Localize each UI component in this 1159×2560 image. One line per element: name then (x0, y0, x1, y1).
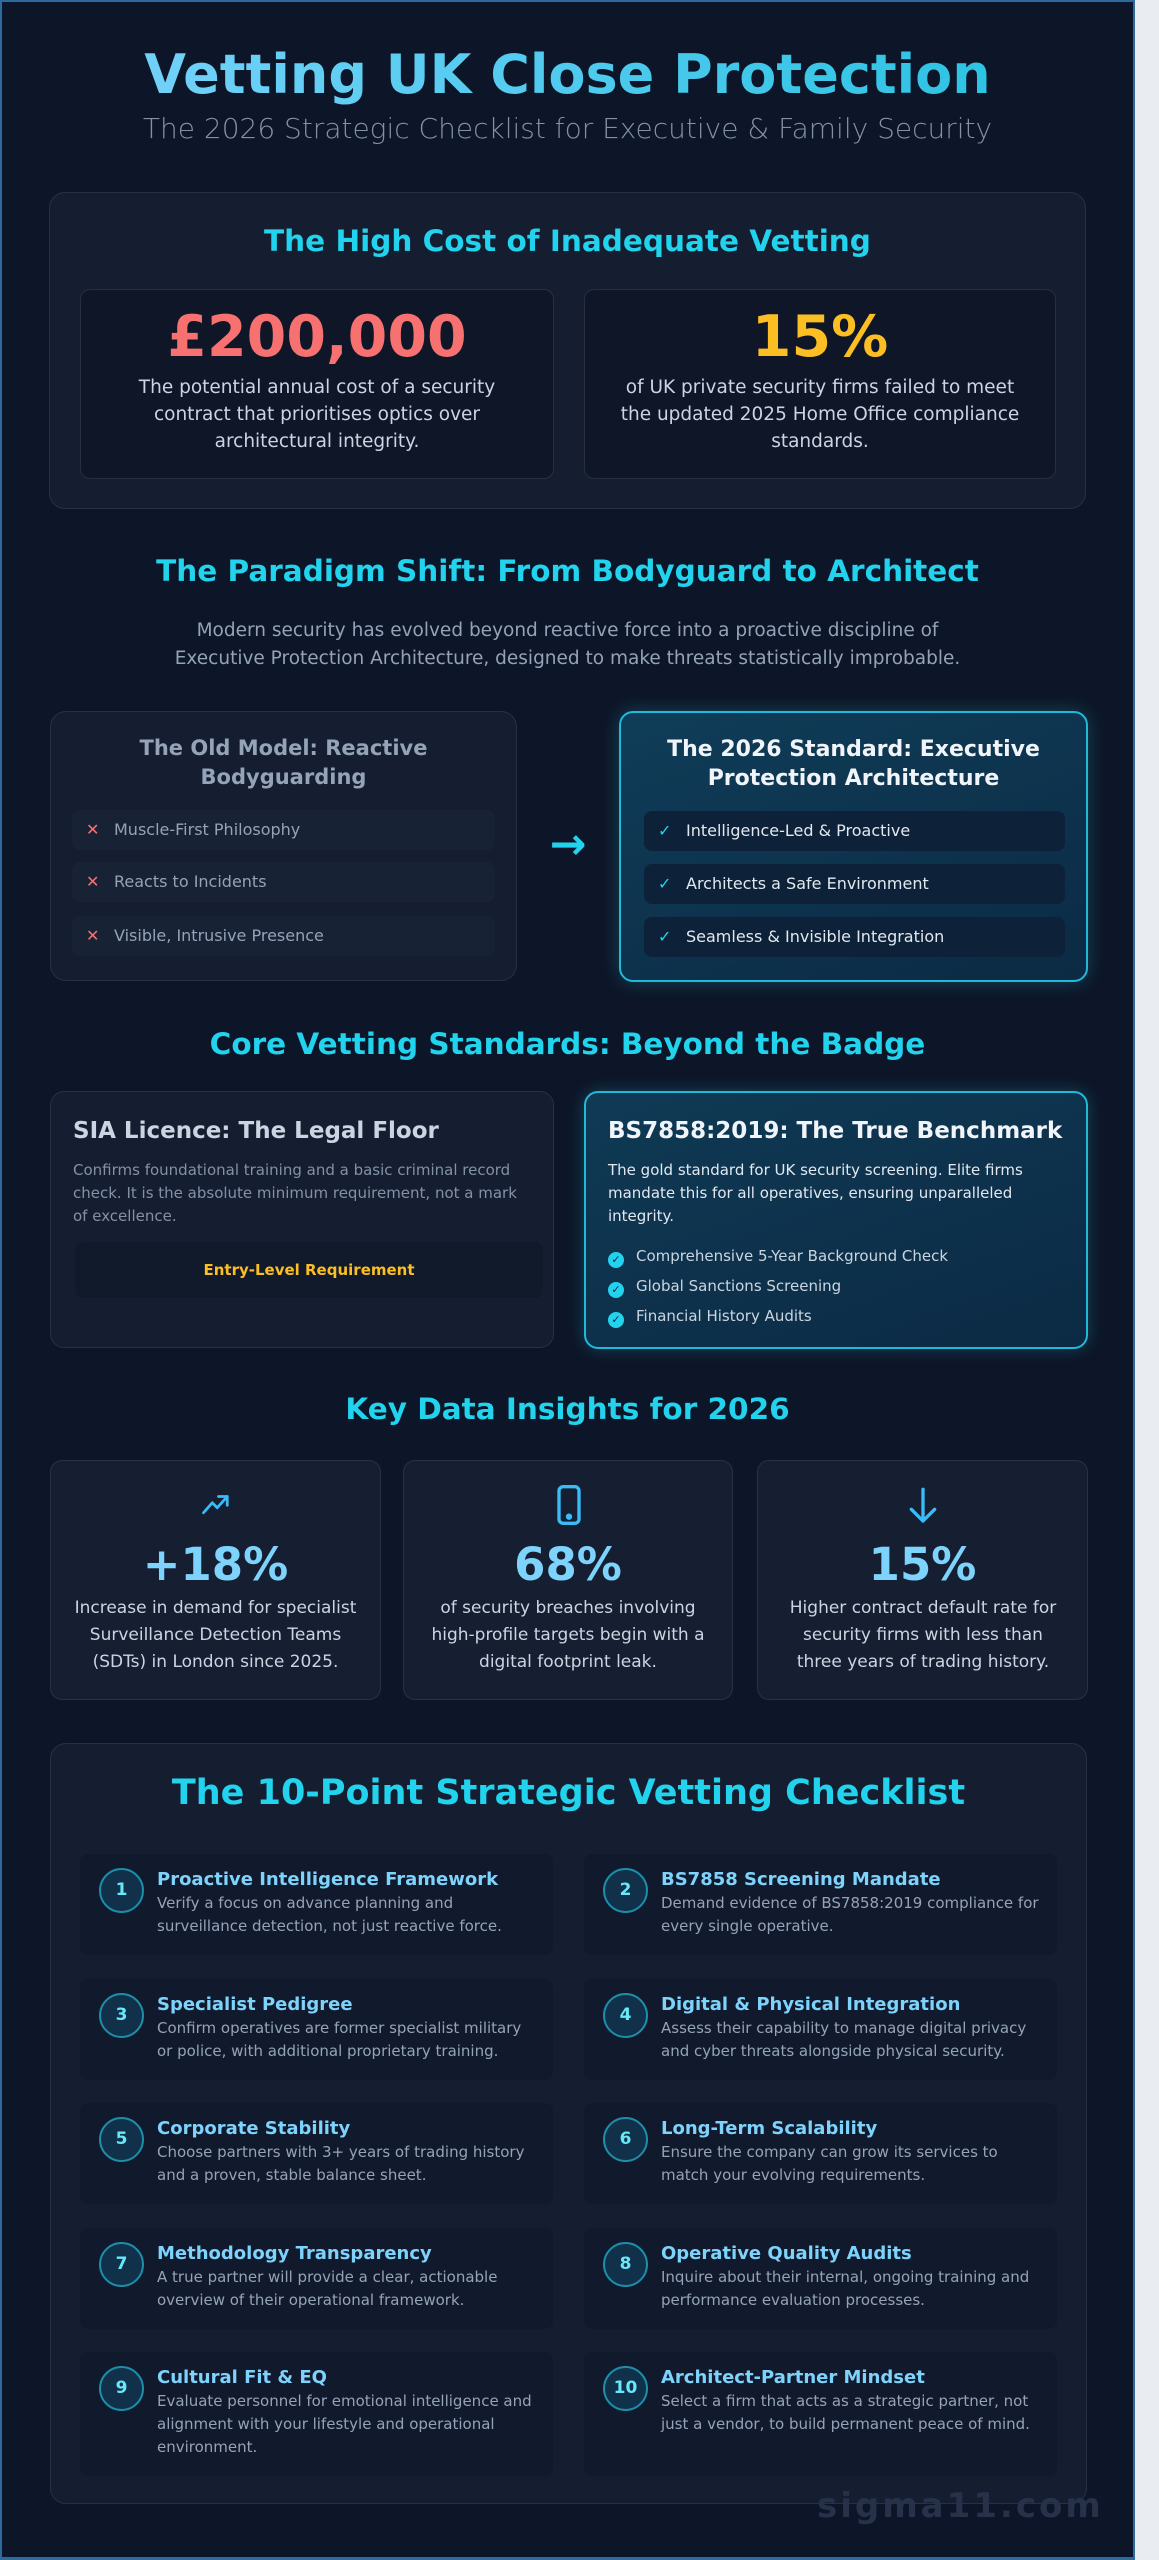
item 8: 8 (620, 2254, 631, 2274)
card: 68%: of security breaches involving high-profile targets begin with a digital footprint leak. (431, 1598, 705, 1672)
item 3: Confirm operatives are former specialist military or police, with additional proprietary training. (157, 2019, 521, 2060)
item 5: 5 (116, 2129, 127, 2149)
card: +18%: +18% (143, 1538, 288, 1591)
BS bullets: Global Sanctions Screening (636, 1277, 841, 1295)
stat: 15%: 15% (752, 304, 888, 370)
item 6 (584, 2103, 1057, 2204)
item 1: 1 (116, 1880, 127, 1900)
old items: Muscle-First Philosophy (114, 820, 300, 839)
item 10: 10 (614, 2378, 637, 2398)
stat: 15% (584, 289, 1056, 479)
card: 15% (757, 1460, 1088, 1700)
title (2, 40, 1133, 110)
new standard title: The 2026 Standard: Executive (667, 737, 1040, 762)
SIA badge: Entry-Level Requirement (203, 1261, 415, 1279)
item 4 (584, 1979, 1057, 2080)
item 7 (80, 2228, 553, 2329)
item 10: Architect-Partner Mindset (661, 2367, 925, 2388)
old items: Visible, Intrusive Presence (114, 926, 324, 945)
item 2: 2 (620, 1880, 631, 1900)
item 1: Verify a focus on advance planning and surveillance detection, not just reactive force. (157, 1894, 502, 1935)
BS bullets (608, 1247, 948, 1328)
old model title (140, 736, 427, 789)
checklist heading: The 10-Point Strategic Vetting Checklist (172, 1773, 965, 1813)
card: 15%: Higher contract default rate for security firms with less than three years of trading history. (790, 1598, 1056, 1672)
item 9 (80, 2352, 553, 2476)
heading: core vetting: Core Vetting Standards: Beyond the Badge (210, 1027, 925, 1061)
item 5: Corporate Stability (157, 2118, 350, 2139)
item 3 (80, 1979, 553, 2080)
item 7: Methodology Transparency (157, 2243, 432, 2264)
panel: checklist (50, 1743, 1087, 2504)
BS bullets: ✓ (611, 1283, 621, 1296)
old items: Reacts to Incidents (114, 872, 267, 891)
watermark: sigma11.com (817, 2486, 1104, 2526)
item 9: Cultural Fit & EQ (157, 2367, 327, 2388)
SIA desc: Confirms foundational training and a basic criminal record check. It is the absolute minimum requirement, not a mark of excellence. (73, 1161, 517, 1225)
SIA title: SIA Licence: The Legal Floor (73, 1118, 439, 1144)
item 6: Ensure the company can grow its services to match your evolving requirements. (661, 2143, 998, 2184)
title: Vetting UK Close Protection (144, 43, 991, 106)
item 9: 9 (116, 2378, 127, 2398)
BS desc: The gold standard for UK security screening. Elite firms mandate this for all operatives, ensuring unparalleled integrity. (608, 1161, 1023, 1225)
SIA badge (75, 1242, 543, 1298)
item 2: BS7858 Screening Mandate (661, 1869, 941, 1890)
panel: BS7858 (584, 1091, 1088, 1349)
item 9: Evaluate personnel for emotional intelligence and alignment with your lifestyle and operational environment. (157, 2392, 532, 2456)
heading: key data: Key Data Insights for 2026 (345, 1392, 790, 1426)
card: +18%: Increase in demand for specialist Surveillance Detection Teams (SDTs) in London since 2025. (75, 1598, 356, 1672)
new items (644, 811, 1065, 957)
icon: trending up (202, 1495, 229, 1514)
intro paragraph: Modern security has evolved beyond reactive force into a proactive discipline of (197, 620, 938, 641)
item 1: Proactive Intelligence Framework (157, 1869, 498, 1890)
stat: 200000 (80, 289, 554, 479)
item 10: Select a firm that acts as a strategic partner, not just a vendor, to build permanent peace of mind. (661, 2392, 1030, 2433)
BS bullets: Comprehensive 5-Year Background Check (636, 1247, 948, 1265)
heading: high cost: The High Cost of Inadequate Vetting (264, 224, 871, 258)
stat: 200000: £200,000 (167, 304, 467, 370)
new standard title (667, 737, 1040, 791)
BS title: BS7858:2019: The True Benchmark (608, 1118, 1062, 1144)
stat: 15%: of UK private security firms failed to meet the updated 2025 Home Office compliance standards. (621, 377, 1019, 452)
item 7: 7 (116, 2254, 127, 2274)
icon: arrow down (910, 1488, 936, 1523)
item 4: Digital & Physical Integration (661, 1994, 960, 2015)
panel: SIA licence (50, 1091, 554, 1348)
BS bullets: ✓ (611, 1313, 621, 1326)
old items (86, 820, 324, 945)
item 8: Inquire about their internal, ongoing training and performance evaluation processes. (661, 2268, 1029, 2309)
new items: Architects a Safe Environment (686, 874, 929, 893)
card: 68%: 68% (514, 1538, 622, 1591)
panel: high cost (49, 192, 1086, 509)
arrow: → (550, 819, 586, 870)
old items: ✕ (86, 872, 99, 891)
item 8: Operative Quality Audits (661, 2243, 912, 2264)
item 4: 4 (620, 2005, 631, 2025)
item 6: Long-Term Scalability (661, 2118, 877, 2139)
item 5: Choose partners with 3+ years of trading history and a proven, stable balance sheet. (157, 2143, 524, 2184)
item 3: 3 (116, 2005, 127, 2025)
heading: paradigm shift: The Paradigm Shift: From Bodyguard to Architect (156, 554, 979, 588)
stat: 200000: The potential annual cost of a security contract that prioritises optics over architectural integrity. (139, 377, 495, 452)
card: 15%: 15% (869, 1538, 976, 1591)
new items: ✓ (658, 874, 671, 893)
new standard title: Protection Architecture (708, 766, 999, 791)
item 2 (584, 1854, 1057, 1955)
item 7: A true partner will provide a clear, actionable overview of their operational framework. (157, 2268, 497, 2309)
panel: new standard (619, 711, 1088, 982)
item 4: Assess their capability to manage digital privacy and cyber threats alongside physical security. (661, 2019, 1026, 2060)
intro paragraph (175, 620, 960, 669)
icon: phone (557, 1485, 581, 1525)
item 1 (80, 1854, 553, 1955)
item 8 (584, 2228, 1057, 2329)
new items: Seamless & Invisible Integration (686, 927, 944, 946)
item 6: 6 (620, 2129, 631, 2149)
new items: Intelligence-Led & Proactive (686, 821, 910, 840)
item 2: Demand evidence of BS7858:2019 compliance for every single operative. (661, 1894, 1039, 1935)
new items: ✓ (658, 821, 671, 840)
panel: old model (50, 711, 517, 981)
new items: ✓ (658, 927, 671, 946)
old items: ✕ (86, 820, 99, 839)
item 10 (584, 2352, 1057, 2476)
old model title: The Old Model: Reactive (140, 736, 427, 760)
intro paragraph: Executive Protection Architecture, designed to make threats statistically improbable. (175, 648, 960, 669)
subtitle: The 2026 Strategic Checklist for Executive & Family Security (143, 112, 992, 145)
old items: ✕ (86, 926, 99, 945)
item 3: Specialist Pedigree (157, 1994, 353, 2015)
old model title: Bodyguarding (201, 765, 366, 789)
card: +18% (50, 1460, 381, 1700)
card: 68% (403, 1460, 733, 1700)
BS bullets: Financial History Audits (636, 1307, 812, 1325)
BS bullets: ✓ (611, 1253, 621, 1266)
item 5 (80, 2103, 553, 2204)
